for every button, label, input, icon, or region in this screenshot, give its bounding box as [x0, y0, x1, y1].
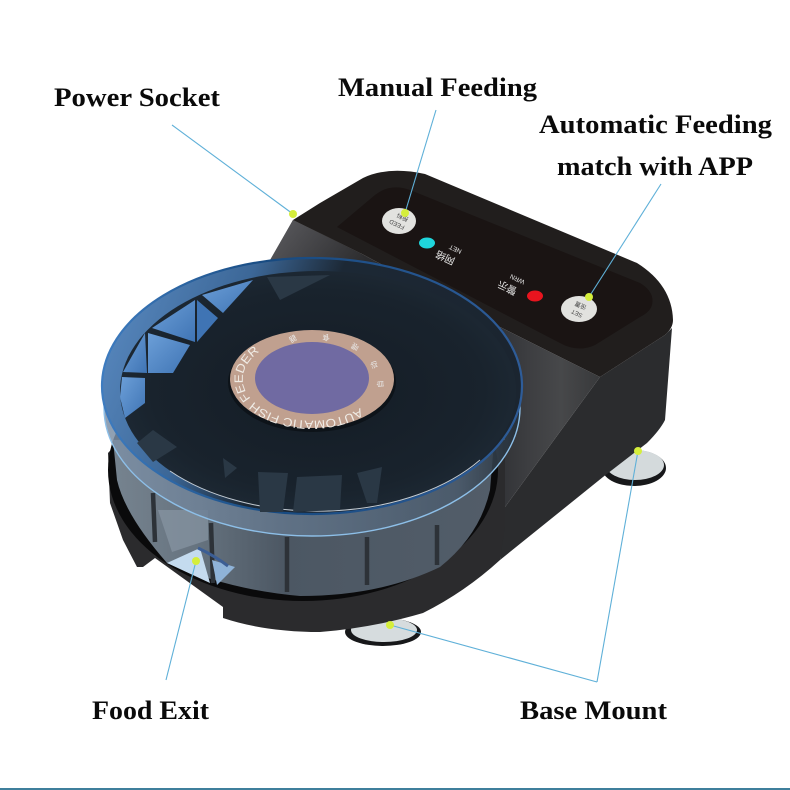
body front facet: [470, 320, 600, 507]
centre badge: [228, 330, 396, 432]
leader lines: [166, 110, 661, 682]
label: Manual Feeding: Manual Feeding: [338, 73, 537, 102]
label: warn: 警示: [495, 277, 519, 298]
indicator: warning: [527, 290, 543, 302]
centre badge: 食: [321, 333, 330, 343]
control panel inset: [337, 187, 652, 349]
label: warn: [495, 272, 526, 298]
icon: front suction cup: [345, 618, 421, 646]
body top surface: [293, 171, 673, 377]
indicator: net: [419, 238, 435, 248]
cylinder hopper: [113, 430, 495, 596]
centre badge: 器: [287, 333, 298, 345]
label: Automatic Feeding: Automatic Feeding: [539, 110, 772, 139]
badge text: AUTOMATIC FISH FEEDER: [234, 346, 361, 429]
feeder base: [108, 440, 505, 632]
control panel buttons and indicators: [382, 208, 597, 322]
label: warn: WRN: [509, 272, 526, 285]
button: feed: FEED: [388, 217, 406, 230]
button: set: SET: [570, 307, 584, 318]
button: feed: 投料: [395, 211, 410, 223]
body right side face: [500, 328, 672, 560]
label: match with APP: match with APP: [557, 152, 753, 181]
button: set: 设置: [574, 299, 588, 312]
marker dots: [192, 209, 642, 629]
transparent lid: [102, 258, 522, 536]
inner dark disc: [120, 271, 516, 511]
icon: right suction cup: [602, 450, 666, 486]
label: Power Socket: Power Socket: [54, 83, 220, 112]
bottom rule: [0, 788, 790, 790]
centre badge: 喂: [349, 341, 361, 352]
food exit opening: [167, 548, 235, 585]
centre badge: 动: [368, 359, 380, 371]
label: net: NET: [448, 243, 463, 255]
feeder body: [262, 171, 673, 560]
label: Base Mount: Base Mount: [520, 696, 667, 725]
dim compartments: [137, 275, 382, 512]
label: net: 网络: [433, 247, 457, 268]
centre badge: 自: [375, 380, 385, 388]
label: Food Exit: Food Exit: [92, 696, 209, 725]
button: set: [561, 296, 597, 322]
label: net: [433, 243, 463, 268]
button: feed: [382, 208, 416, 234]
body left facet: [270, 220, 380, 275]
blue compartments: [120, 280, 253, 418]
